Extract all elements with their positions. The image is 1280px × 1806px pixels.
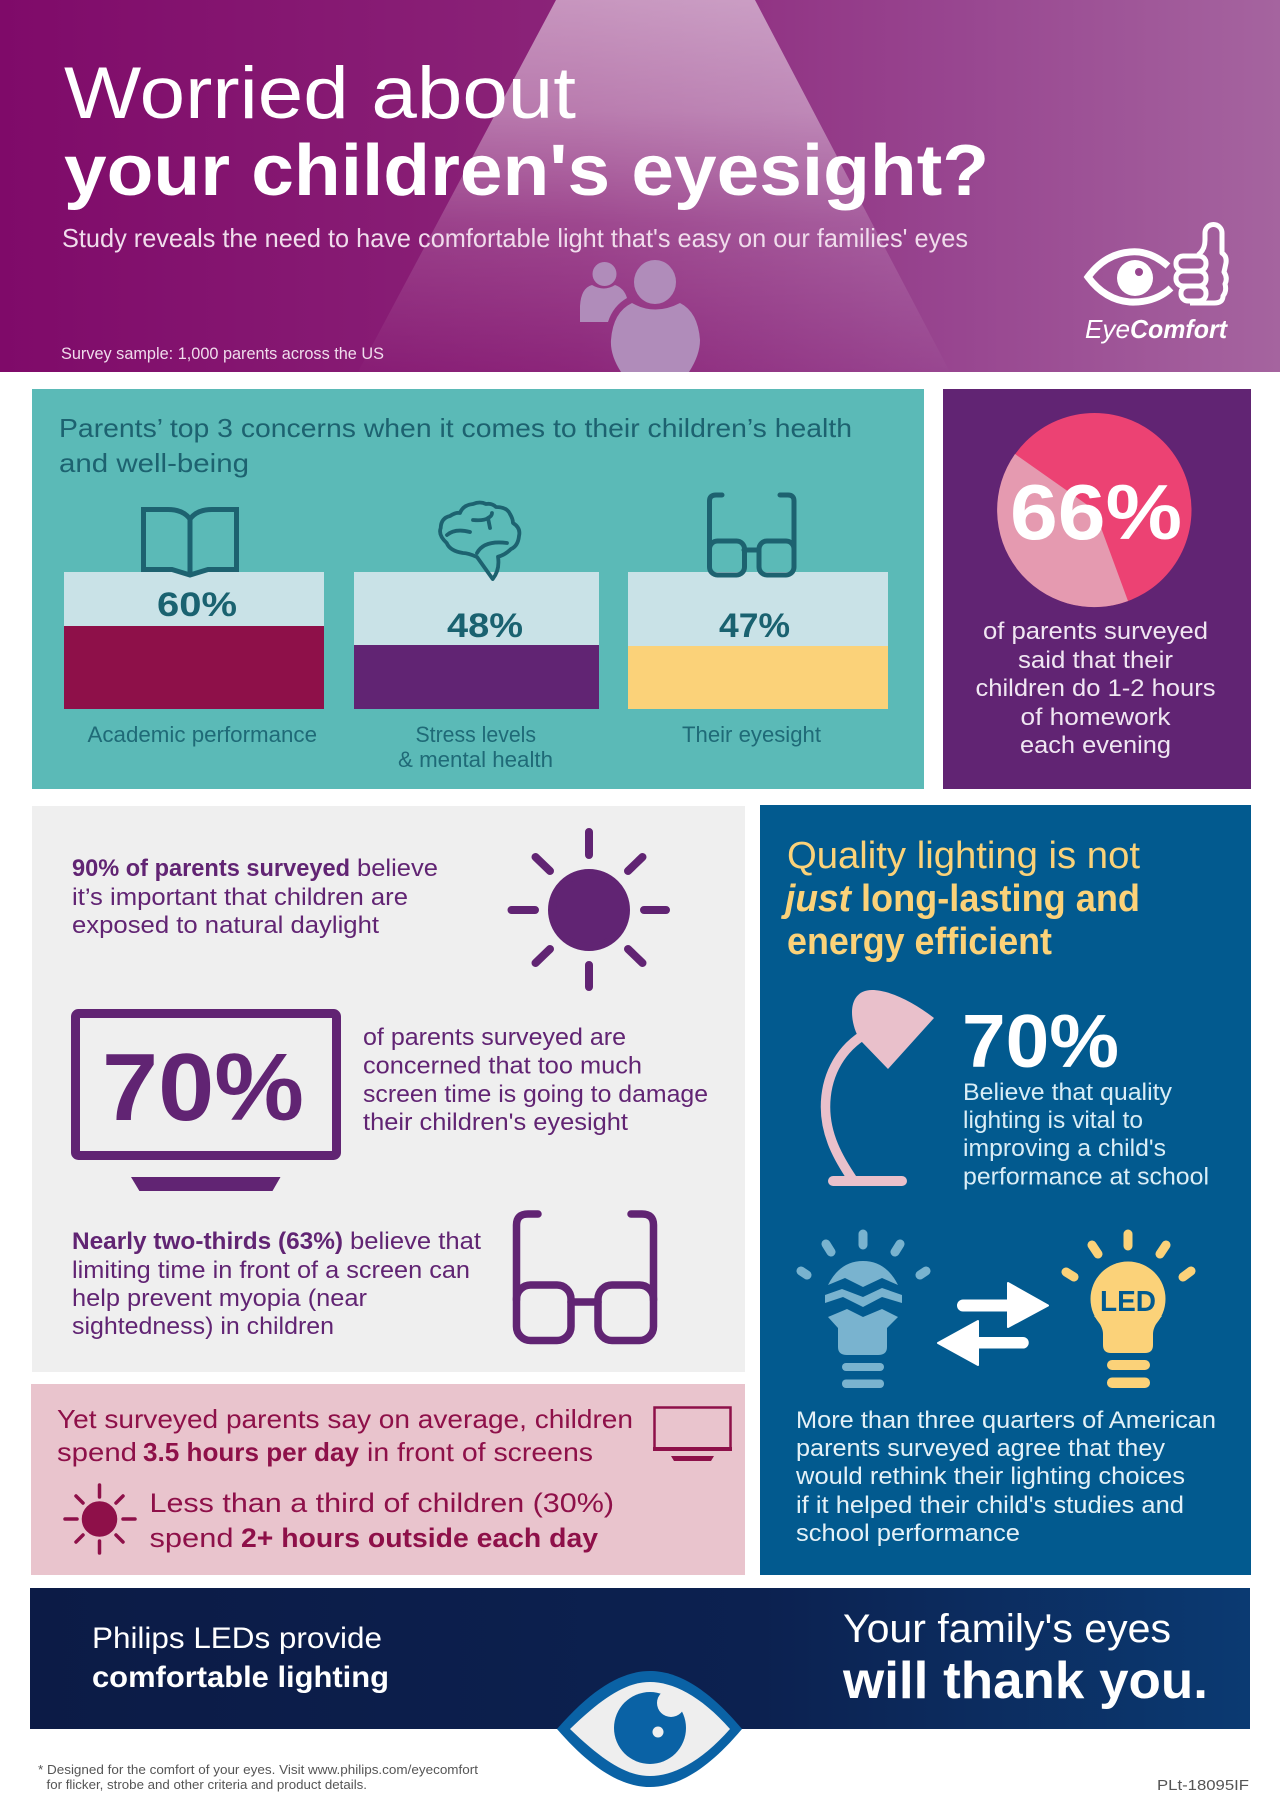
bar: academic performance 60%: 60%	[157, 586, 237, 624]
header banner	[0, 0, 1280, 372]
bar: academic performance 60%	[64, 572, 324, 709]
title: your children's eyesight?	[64, 131, 989, 211]
logo: EyeComfort: Comfort	[1130, 314, 1228, 344]
subtitle: Study reveals the need to have comfortable light that's easy on our families' eyes	[62, 223, 968, 253]
panel: 66% homework	[943, 389, 1251, 789]
outdoors text: spend	[150, 1523, 234, 1553]
myopia text: limiting time in front of a screen can	[72, 1257, 470, 1284]
rethink lighting text	[795, 1407, 1216, 1547]
homework text: said that their	[1018, 647, 1173, 674]
banner text left	[92, 1622, 389, 1694]
footnote: * Designed for the comfort of your eyes. Visit www.philips.com/eyecomfort	[38, 1762, 478, 1777]
bar labels: Stress levels	[416, 722, 536, 747]
panel heading: Parents’ top 3 concerns when it comes to their children’s health	[59, 413, 852, 443]
survey sample note: Survey sample: 1,000 parents across the US	[61, 344, 384, 363]
icon: sun	[512, 832, 666, 987]
banner text right: will thank you.	[842, 1652, 1208, 1710]
bar: stress levels 48%: 48%	[447, 607, 523, 645]
quality lighting text: Believe that quality	[963, 1079, 1172, 1106]
daylight text: it’s important that children are	[72, 884, 408, 911]
footnote: for flicker, strobe and other criteria and product details.	[46, 1777, 367, 1792]
light beam	[358, 0, 950, 372]
rethink lighting text: parents surveyed agree that they	[796, 1435, 1165, 1462]
stat: 66%: 66%	[1010, 468, 1182, 556]
panel: hours per day	[31, 1384, 745, 1575]
icon: monitor with 70%	[76, 1014, 336, 1191]
reference code: PLt-18095IF	[1157, 1777, 1249, 1794]
myopia text: Nearly two-thirds (63%)	[72, 1228, 343, 1255]
screens text: in front of screens	[367, 1437, 593, 1467]
homework text: of parents surveyed	[983, 618, 1208, 645]
daylight text: 90% of parents surveyed	[72, 855, 350, 882]
outdoors text: 2+ hours outside each day	[241, 1523, 598, 1553]
quality lighting text: performance at school	[963, 1164, 1209, 1190]
screen time text: their children's eyesight	[363, 1109, 628, 1136]
screen time text: screen time is going to damage	[363, 1081, 708, 1108]
rethink lighting text: school performance	[796, 1520, 1020, 1547]
homework text	[976, 618, 1216, 759]
title: Worried about	[64, 53, 576, 134]
icon: LED bulb: LED	[1100, 1286, 1156, 1318]
pie chart	[997, 413, 1192, 607]
icon: book	[144, 510, 236, 575]
screens text: Yet surveyed parents say on average, children	[57, 1404, 633, 1434]
bar labels: Their eyesight	[682, 722, 821, 747]
icon: small tv	[653, 1408, 732, 1461]
icon: parent and child	[580, 260, 700, 372]
logo: EyeComfort	[1085, 224, 1228, 344]
homework text: each evening	[1020, 732, 1171, 759]
icon: desk lamp	[826, 990, 934, 1186]
screen time text: of parents surveyed are	[363, 1024, 626, 1051]
stat: 70%: 70%	[962, 999, 1119, 1083]
icon: old bulb	[801, 1234, 926, 1388]
panel heading: Quality lighting is not	[787, 835, 1140, 877]
panel heading: energy efficient	[787, 921, 1052, 963]
quality lighting text: lighting is vital to	[963, 1107, 1143, 1134]
myopia text	[72, 1228, 481, 1340]
panel heading: and well-being	[59, 448, 249, 478]
icon: eye	[557, 1671, 742, 1787]
panel heading	[780, 835, 1140, 963]
footnote	[38, 1762, 478, 1792]
icon: swap arrows	[938, 1283, 1048, 1365]
banner text right: Your family's eyes	[843, 1607, 1171, 1651]
logo: EyeComfort: Eye	[1085, 314, 1130, 344]
banner text right	[842, 1607, 1208, 1710]
screen time text: concerned that too much	[363, 1052, 642, 1080]
panel heading	[59, 413, 852, 478]
icon: monitor with 70%: 70%	[102, 1034, 304, 1141]
icon: small sun	[65, 1485, 135, 1553]
screens text: 3.5 hours per day	[143, 1437, 360, 1467]
icon: LED bulb	[1066, 1234, 1191, 1388]
myopia text: believe that	[350, 1228, 481, 1255]
panel heading: just	[780, 878, 852, 920]
myopia text: help prevent myopia (near	[72, 1285, 367, 1312]
myopia text: sightedness) in children	[72, 1313, 334, 1340]
outdoors text: Less than a third of children (30%)	[150, 1488, 614, 1518]
daylight text: exposed to natural daylight	[72, 912, 379, 939]
screen time text	[363, 1024, 708, 1136]
bar labels	[88, 722, 821, 772]
homework text: of homework	[1020, 704, 1172, 731]
bar: eyesight 47%: 47%	[719, 607, 790, 645]
quality lighting text	[963, 1079, 1209, 1190]
banner text left: Philips LEDs provide	[92, 1622, 382, 1655]
quality lighting text: improving a child's	[963, 1135, 1166, 1162]
icon: glasses	[710, 495, 794, 575]
bar: eyesight 47%	[628, 572, 888, 709]
daylight text	[72, 855, 438, 939]
outdoors text	[150, 1488, 614, 1553]
bar: stress levels 48%	[354, 572, 599, 709]
icon: large glasses	[516, 1214, 654, 1340]
rethink lighting text: would rethink their lighting choices	[795, 1463, 1185, 1490]
banner: Philips LEDs	[30, 1588, 1250, 1729]
panel heading: long-lasting and	[861, 878, 1140, 920]
screens text	[57, 1404, 633, 1467]
panel: screen time and daylight	[32, 806, 745, 1372]
icon: brain	[440, 502, 519, 579]
title	[64, 53, 989, 211]
screens text: spend	[57, 1437, 137, 1467]
banner text left: comfortable lighting	[92, 1661, 389, 1694]
rethink lighting text: if it helped their child's studies and	[796, 1492, 1184, 1519]
bar labels: & mental health	[398, 747, 553, 772]
homework text: children do 1-2 hours	[976, 675, 1216, 702]
panel: quality lighting	[760, 805, 1251, 1575]
rethink lighting text: More than three quarters of American	[796, 1407, 1216, 1434]
panel: top 3 concerns	[32, 389, 924, 789]
daylight text: believe	[357, 855, 438, 882]
bar labels: Academic performance	[88, 722, 317, 747]
